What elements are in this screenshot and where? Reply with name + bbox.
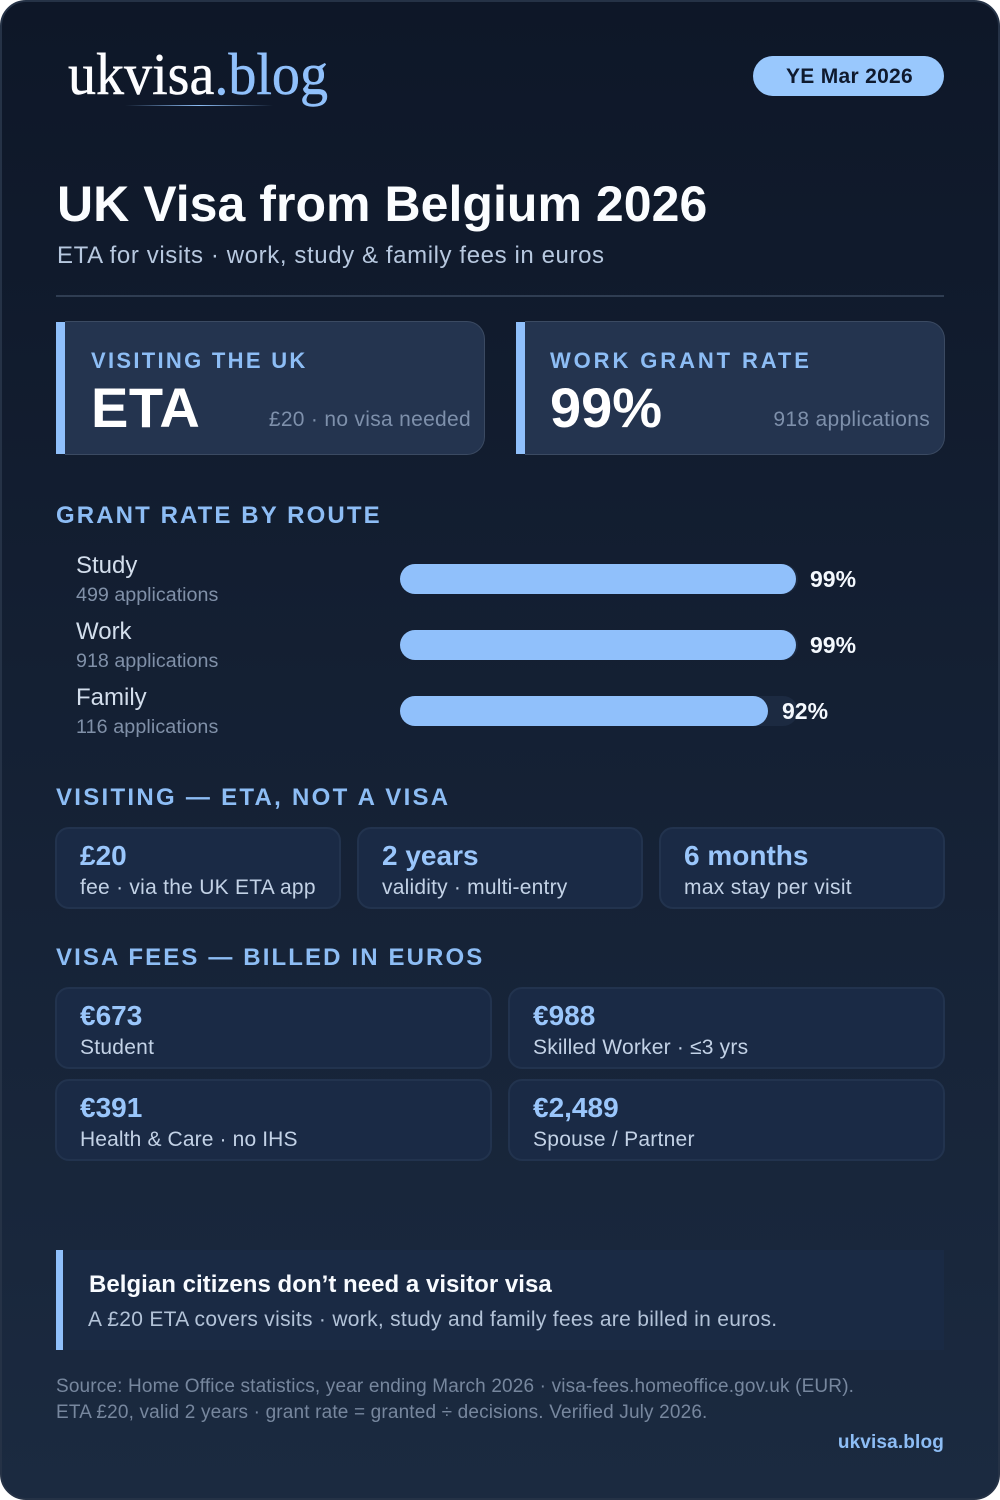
stat card: work grant rate: WORK GRANT RATE [550,348,812,373]
heading: visa fees: VISA FEES — BILLED IN EUROS [56,944,484,971]
card: max stay [659,827,945,909]
stat card: visiting: £20 · no visa needed [269,408,471,431]
bar chart: grant rate by route: 499 applications [76,584,218,606]
card: validity: validity · multi-entry [382,876,568,899]
card: student fee: €673 [80,1000,142,1031]
callout [56,1250,944,1350]
callout: Belgian citizens don’t need a visitor visa [89,1271,552,1298]
card: fee: fee · via the UK ETA app [80,876,316,899]
heading: visiting: VISITING — ETA, NOT A VISA [56,784,450,811]
subtitle: ETA for visits · work, study & family fees in euros [57,242,605,269]
stat card: work grant rate: 918 applications [773,408,930,431]
bar chart: grant rate by route: Work [76,618,132,645]
bar chart: grant rate by route: 99% [810,632,856,658]
card: validity [357,827,643,909]
card: student fee: Student [80,1036,154,1059]
logo: ukvisa.blog [68,41,328,107]
bar chart: grant rate by route: 918 applications [76,650,218,672]
bar chart: grant rate by route: 92% [782,698,828,724]
card: skilled worker fee [508,987,945,1069]
card: fee: £20 [80,840,127,871]
stat card: work grant rate [516,321,945,455]
bar chart: grant rate by route: 99% [810,566,856,592]
stat card: visiting [56,321,485,455]
card: spouse fee: Spouse / Partner [533,1128,695,1151]
card: health and care fee: €391 [80,1092,142,1123]
source note: Source: Home Office statistics, year ending March 2026 · visa-fees.homeoffice.gov.uk (EUR). [56,1376,854,1397]
heading: grant rate by route: GRANT RATE BY ROUTE [56,502,382,529]
card: fee [55,827,341,909]
title: UK Visa from Belgium 2026 [57,176,707,232]
bar chart: grant rate by route: Family [76,684,147,711]
source note [56,1376,854,1423]
bar chart: grant rate by route: 116 applications [76,716,218,738]
card: spouse fee [508,1079,945,1161]
card: student fee [55,987,492,1069]
stat card: visiting: ETA [91,376,200,439]
date badge [755,56,944,96]
card: spouse fee: €2,489 [533,1092,619,1123]
card: skilled worker fee: Skilled Worker · ≤3 yrs [533,1036,748,1059]
stat card: visiting: VISITING THE UK [91,348,308,373]
bar chart: grant rate by route [76,552,856,738]
footer brand: ukvisa.blog [838,1432,944,1453]
bar chart: grant rate by route: Study [76,552,137,579]
card: max stay: 6 months [684,840,808,871]
callout: A £20 ETA covers visits · work, study and family fees are billed in euros. [88,1308,777,1331]
card: max stay: max stay per visit [684,876,852,899]
card: health and care fee [55,1079,492,1161]
card: skilled worker fee: €988 [533,1000,595,1031]
source note: ETA £20, valid 2 years · grant rate = granted ÷ decisions. Verified July 2026. [56,1402,708,1423]
card: health and care fee: Health & Care · no IHS [80,1128,298,1151]
date badge: YE Mar 2026 [786,65,913,88]
card: validity: 2 years [382,840,479,871]
stat card: work grant rate: 99% [550,376,662,439]
